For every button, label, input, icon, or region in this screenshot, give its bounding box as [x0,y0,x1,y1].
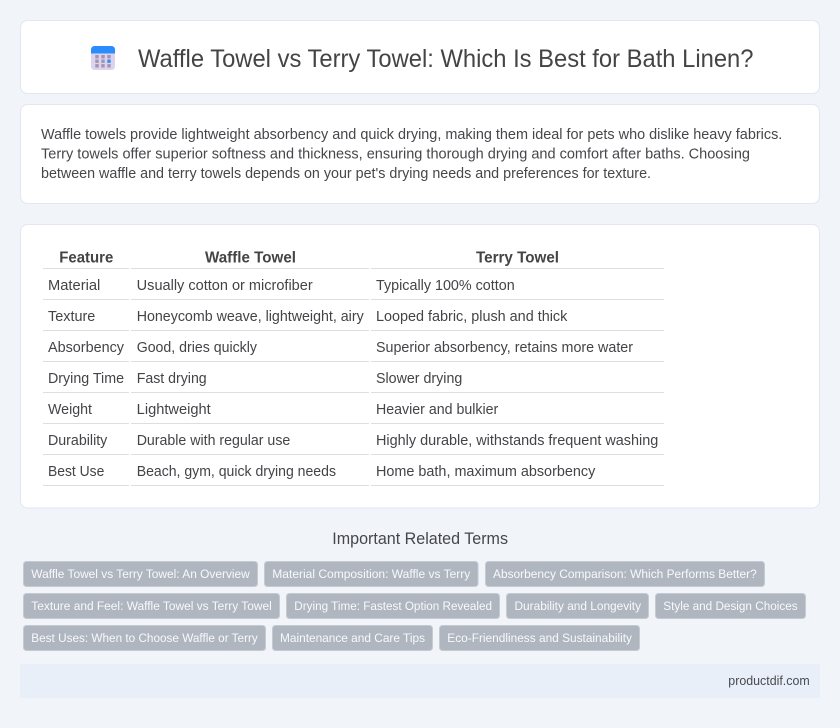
row: texture [43,309,664,331]
row: material: Usually cotton or microfiber [137,278,313,294]
icon: calendar [91,46,115,70]
row: durability: Durable with regular use [137,433,290,449]
tag: style and design: Style and Design Choices [663,599,798,613]
tag: eco-friendliness: Eco-Friendliness and Sustainability [447,631,633,645]
table header row [43,250,664,269]
heading: related terms: Important Related Terms [332,530,508,548]
row: weight: Weight [48,402,92,418]
intro paragraph: Waffle towels provide lightweight absorbency and quick drying, making them ideal for pets who dislike heavy fabrics. [41,127,782,143]
tag: maintenance [272,626,432,650]
tag: absorbency comparison: Absorbency Comparison: Which Performs Better? [493,567,757,581]
row: best use: Best Use [48,464,104,480]
tag: durability [506,594,648,618]
footer source link: productdif.com [728,673,810,688]
tag: drying time: Drying Time: Fastest Option Revealed [294,599,492,613]
row: absorbency: Good, dries quickly [137,340,258,356]
row: texture: Honeycomb weave, lightweight, airy [137,309,364,325]
tag: overview: Waffle Towel vs Terry Towel: An Overview [31,567,250,581]
tag: maintenance: Maintenance and Care Tips [280,631,425,645]
tag: texture and feel: Texture and Feel: Waffle Towel vs Terry Towel [31,599,272,613]
tag: overview [24,562,258,586]
row: material: Typically 100% cotton [376,278,515,294]
row: material [43,278,664,300]
tag: material composition [264,562,478,586]
panel: comparison table [20,224,820,508]
row: durability [43,433,664,455]
row: texture: Texture [48,309,95,325]
title: Waffle Towel vs Terry Towel: Which Is Best for Bath Linen? [138,46,754,73]
panel: introduction [20,104,820,204]
row: drying time: Drying Time [48,371,124,387]
row: absorbency: Absorbency [48,340,125,356]
table header row: Waffle Towel [205,250,296,267]
tag: best uses: Best Uses: When to Choose Waffle or Terry [31,631,259,645]
intro paragraph: between waffle and terry towels depends on your pet's drying needs and preferences for texture. [41,166,651,182]
intro paragraph: Terry towels offer superior softness and thickness, ensuring thorough drying and comfort after baths. Choosing [41,147,750,163]
row: best use [43,464,664,486]
row: weight [43,402,664,424]
row: best use: Home bath, maximum absorbency [376,464,596,480]
row: texture: Looped fabric, plush and thick [376,309,568,325]
tag: material composition: Material Composition: Waffle vs Terry [272,567,471,581]
footer [20,664,820,698]
row: drying time: Fast drying [137,371,207,387]
row: weight: Lightweight [137,402,211,418]
tag: eco-friendliness [440,626,640,650]
panel: related term tags [24,562,806,650]
row: drying time: Slower drying [376,371,462,387]
tag: drying time [286,594,500,618]
tag: absorbency comparison [486,562,764,586]
table header row: Terry Towel [476,250,559,267]
tag: best uses [24,626,266,650]
tag: durability: Durability and Longevity [514,599,642,613]
tag: texture and feel [24,594,280,618]
panel: header [20,20,820,94]
row: drying time [43,371,664,393]
intro paragraph [41,127,782,182]
row: weight: Heavier and bulkier [376,402,498,418]
row: best use: Beach, gym, quick drying needs [137,464,336,480]
row: durability: Durability [48,433,108,449]
row: material: Material [48,278,100,294]
table header row: Feature [59,250,114,267]
tag: style and design [656,594,806,618]
row: durability: Highly durable, withstands frequent washing [376,433,658,449]
row: absorbency [43,340,664,362]
row: absorbency: Superior absorbency, retains more water [376,340,633,356]
